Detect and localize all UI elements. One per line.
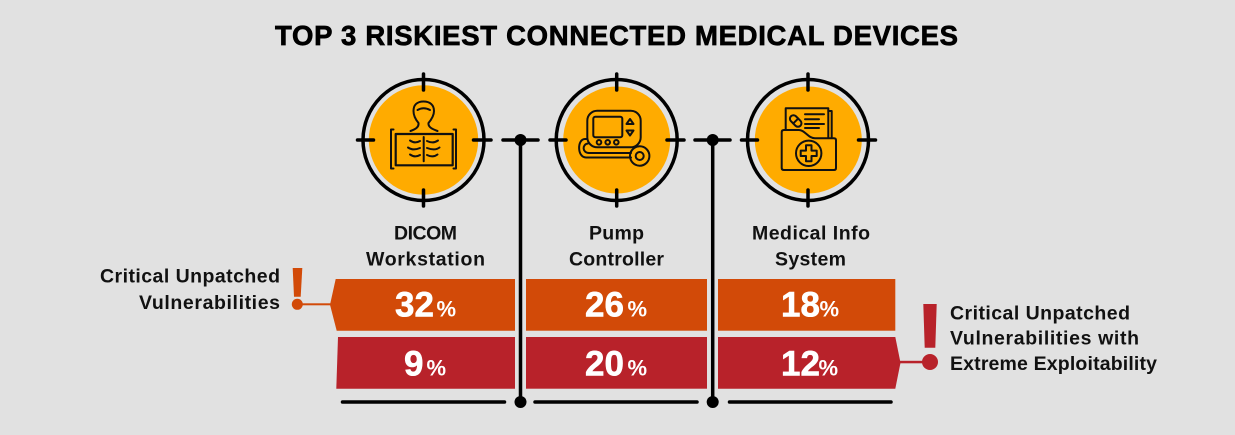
value: 20%: % [628, 356, 647, 381]
legend icon: orange exclamation [292, 268, 331, 310]
icon badge: medical info system [742, 74, 876, 206]
legend text: extreme exploitability: Extreme Exploitability [950, 353, 1157, 375]
title: TOP 3 RISKIEST CONNECTED MEDICAL DEVICES [275, 20, 958, 51]
device label: DICOM Workstation [366, 222, 485, 270]
device label: Medical Info System: System [775, 248, 846, 270]
value: 12%: 12 [781, 345, 820, 384]
value: 18%: 18 [781, 286, 820, 325]
icon: infusion pump [579, 111, 649, 166]
legend icon: red exclamation [899, 304, 938, 370]
connector: right divider [695, 134, 730, 408]
device label: DICOM Workstation: Workstation [366, 248, 485, 270]
value: 32%: 32 [395, 286, 434, 325]
baseline rules [342, 400, 891, 404]
value: 26%: 26 [585, 286, 624, 325]
value: 9%: 9 [404, 345, 423, 384]
device label: Pump Controller [569, 222, 664, 270]
device label: Pump Controller: Pump [589, 222, 644, 244]
legend text: critical unpatched vulnerabilities: Vulnerabilities [139, 292, 280, 314]
value: 26%: % [628, 297, 647, 322]
device label: Medical Info System: Medical Info [752, 222, 870, 244]
device label: DICOM Workstation: DICOM [394, 222, 457, 244]
icon: x-ray [391, 102, 456, 168]
legend text: critical unpatched vulnerabilities [100, 266, 280, 314]
connector: left divider [503, 134, 538, 408]
value: 12%: % [818, 356, 838, 381]
value: 18%: % [820, 297, 839, 322]
legend text: critical unpatched vulnerabilities: Critical Unpatched [100, 266, 280, 288]
bar row: critical unpatched vulnerabilities [330, 279, 895, 331]
value: 20%: 20 [585, 345, 624, 384]
legend text: extreme exploitability: Vulnerabilities with [950, 328, 1139, 350]
icon badge: pump controller [550, 74, 684, 206]
value: 32%: % [436, 297, 456, 322]
icon badge: DICOM workstation [358, 74, 491, 206]
device label: Medical Info System [752, 222, 870, 270]
value: 9%: % [426, 356, 446, 381]
device label: Pump Controller: Controller [569, 248, 664, 270]
legend text: extreme exploitability [950, 302, 1157, 375]
icon: medical folder [782, 108, 836, 170]
bar row: extreme exploitability [336, 337, 900, 389]
legend text: extreme exploitability: Critical Unpatched [950, 302, 1130, 324]
